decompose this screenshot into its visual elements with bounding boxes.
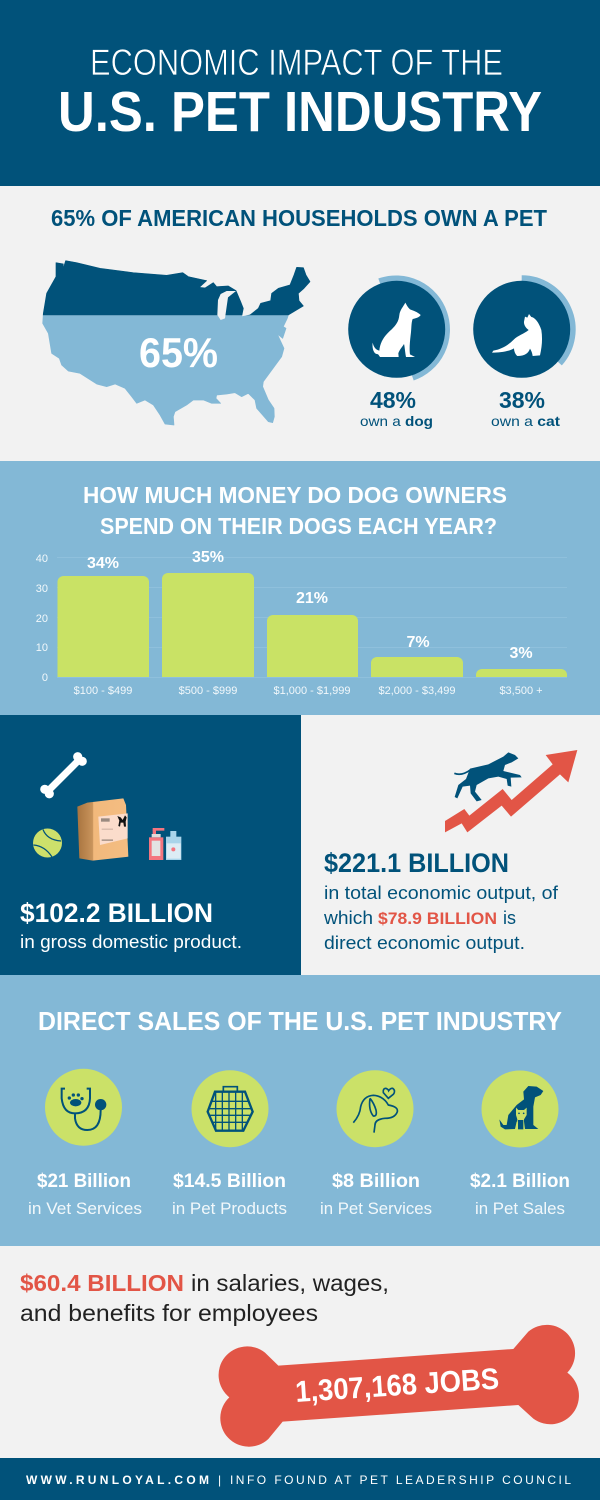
icon: dog with heart	[353, 1088, 397, 1133]
cat ownership stat	[473, 278, 573, 429]
spending heading	[83, 482, 507, 539]
dog ownership stat	[348, 278, 447, 429]
bar chart: 21%	[296, 590, 328, 607]
red bone jobs badge	[219, 1325, 579, 1447]
output description: which	[323, 908, 373, 928]
panel: total economic output	[301, 715, 600, 975]
footer: INFO FOUND AT PET LEADERSHIP COUNCIL	[230, 1473, 571, 1487]
US map 65 percent: 65%	[139, 329, 218, 376]
bar chart: 35%	[192, 549, 224, 566]
icon: dog	[372, 303, 421, 357]
icon: bone toy	[40, 752, 87, 798]
item: vet services	[28, 1069, 142, 1218]
item: pet products	[172, 1070, 287, 1218]
bar chart: 20	[36, 613, 48, 625]
bar chart: 3%	[509, 645, 533, 662]
output description: direct economic output.	[324, 933, 525, 953]
output description	[323, 883, 559, 953]
bar chart: 7%	[406, 634, 430, 651]
bar chart	[36, 549, 567, 697]
bar chart: $1,000 - $1,999	[273, 685, 351, 697]
item: pet services: in Pet Services	[320, 1200, 432, 1218]
GDP description: in gross domestic product.	[20, 932, 242, 952]
cat ownership stat: own a cat	[491, 413, 560, 429]
icon: dog and cat	[499, 1086, 543, 1129]
output description: $78.9 BILLION	[378, 909, 497, 928]
bar chart: 40	[36, 553, 48, 565]
direct sales heading: DIRECT SALES OF THE U.S. PET INDUSTRY	[38, 1006, 562, 1036]
item: pet sales: in Pet Sales	[475, 1200, 565, 1218]
item: vet services: in Vet Services	[28, 1200, 142, 1218]
output value: $221.1 BILLION	[324, 848, 509, 878]
item: pet sales: $2.1 Billion	[470, 1170, 570, 1192]
salaries text: in salaries, wages,	[191, 1270, 389, 1296]
icon: leaping dog	[454, 752, 522, 801]
output description: is	[503, 908, 516, 928]
cat ownership stat: 38%	[499, 387, 545, 413]
bar chart: 34%	[87, 555, 119, 572]
bar chart: 30	[36, 583, 48, 595]
panel: dog owner spending	[0, 461, 600, 715]
header panel	[0, 0, 600, 186]
output description: in total economic output, of	[324, 883, 559, 903]
item: pet services: $8 Billion	[332, 1170, 420, 1192]
title line 1: ECONOMIC IMPACT OF THE	[90, 42, 503, 83]
icon: pet carrier	[207, 1087, 253, 1133]
red bone jobs badge: 1,307,168 JOBS	[294, 1363, 500, 1409]
item: vet services: $21 Billion	[37, 1170, 131, 1192]
dog ownership stat: 48%	[370, 387, 416, 413]
item: pet products: in Pet Products	[172, 1200, 287, 1218]
icon: cat	[492, 314, 542, 356]
salaries text: $60.4 BILLION	[20, 1270, 184, 1296]
bar chart: 0	[42, 672, 48, 684]
footer	[0, 1458, 600, 1500]
icon: pet food bag	[77, 798, 128, 861]
panel: gross domestic product	[0, 715, 301, 975]
spending heading: SPEND ON THEIR DOGS EACH YEAR?	[100, 513, 497, 539]
icon: tennis ball	[33, 828, 62, 858]
salaries text: and benefits for employees	[20, 1300, 318, 1326]
icon: stethoscope	[62, 1089, 106, 1130]
icon: rising red arrow	[445, 750, 577, 832]
spending heading: HOW MUCH MONEY DO DOG OWNERS	[83, 482, 507, 508]
panel: pet ownership	[42, 210, 576, 429]
bar chart: $100 - $499	[74, 685, 132, 697]
US map 65 percent	[43, 261, 310, 425]
bar chart: 10	[36, 642, 48, 654]
footer: WWW.RUNLOYAL.COM	[26, 1473, 209, 1487]
item: pet services	[320, 1070, 432, 1218]
panel: salaries and jobs	[0, 1246, 600, 1458]
title line 2: U.S. PET INDUSTRY	[58, 80, 542, 144]
salaries text	[20, 1270, 389, 1326]
item: pet products: $14.5 Billion	[173, 1170, 286, 1192]
GDP value: $102.2 BILLION	[20, 898, 213, 928]
footer: |	[218, 1473, 221, 1487]
bar chart: $2,000 - $3,499	[378, 685, 456, 697]
icon: grooming bottles	[149, 828, 181, 860]
ownership heading: 65% OF AMERICAN HOUSEHOLDS OWN A PET	[51, 205, 547, 231]
bar chart: $3,500 +	[499, 685, 543, 697]
panel: direct sales	[0, 975, 600, 1246]
item: pet sales	[470, 1070, 570, 1218]
bar chart: $500 - $999	[179, 685, 237, 697]
dog ownership stat: own a dog	[360, 413, 433, 429]
